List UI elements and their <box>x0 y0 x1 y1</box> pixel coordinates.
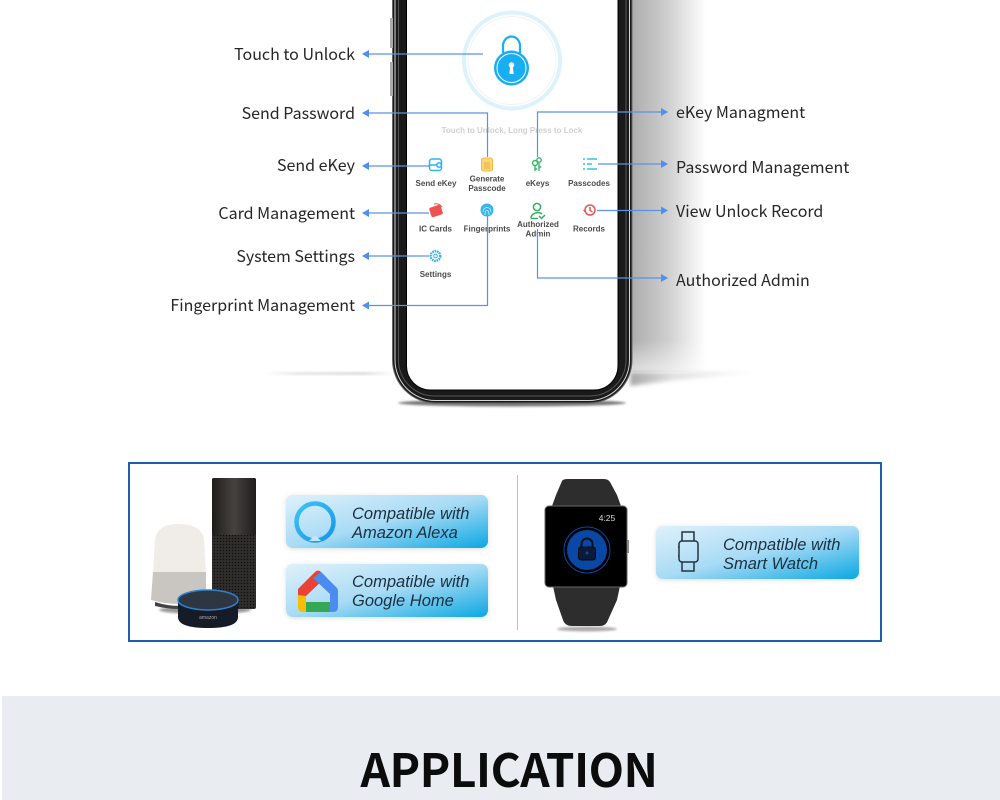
badge text: Compatible with <box>723 536 840 554</box>
badge: Smart Watch <box>656 526 859 580</box>
callout labels, left: Fingerprint Management <box>170 292 355 316</box>
watch lock icon <box>564 527 610 573</box>
icon: authorized admin <box>531 203 545 218</box>
icon: watch outline <box>678 532 698 571</box>
callout labels, left: System Settings <box>236 243 355 267</box>
callout labels, left <box>170 41 356 316</box>
phone drop shadow on the wall <box>265 0 770 406</box>
callout labels, right <box>676 99 849 291</box>
icon: padlock <box>494 36 529 86</box>
label: Records: Records <box>573 224 606 234</box>
icon: records <box>583 205 595 215</box>
watch time: 4:25 <box>599 513 616 523</box>
label: Authorized Admin: Authorized <box>517 220 559 229</box>
app menu grid <box>416 158 610 279</box>
round speaker <box>178 590 238 628</box>
label: Authorized Admin: Admin <box>526 230 551 238</box>
badge: Amazon Alexa <box>286 495 488 549</box>
label: IC Cards: IC Cards <box>419 224 452 234</box>
badge: Google Home <box>286 564 488 618</box>
callout labels, right: Authorized Admin <box>676 267 810 291</box>
white speaker <box>151 524 206 609</box>
label: Send eKey: Send eKey <box>416 179 457 188</box>
panel: compatibility <box>129 463 881 641</box>
icon: eKeys <box>532 158 541 171</box>
unlock ring <box>464 12 560 108</box>
icon: Alexa ring <box>296 504 334 541</box>
icon: generate passcode <box>482 158 492 171</box>
icon: fingerprints <box>480 204 494 216</box>
icon: send eKey <box>430 159 442 170</box>
label: Generate Passcode: Passcode <box>468 184 506 193</box>
callout labels, left: Card Management <box>218 200 355 224</box>
smart watch <box>545 479 629 632</box>
callout lines and arrows <box>363 54 667 306</box>
icon: settings <box>431 251 440 261</box>
black tower speaker <box>212 478 256 609</box>
badge text: Compatible with <box>352 573 469 591</box>
callout labels, right: Password Management <box>676 154 849 178</box>
label: Settings: Settings <box>420 270 452 279</box>
callout labels, left: Send Password <box>242 100 355 124</box>
callout labels, right: eKey Managment <box>676 99 805 123</box>
badge text: Amazon Alexa <box>351 524 458 542</box>
hint text: Touch to Unlock, Long Press to Lock <box>442 126 583 135</box>
heading: APPLICATION <box>359 735 658 800</box>
phone <box>390 0 632 403</box>
label: Fingerprints: Fingerprints <box>464 224 511 234</box>
icon: passcodes <box>583 159 597 169</box>
round speaker: amazon <box>199 615 217 621</box>
badge text: Google Home <box>352 592 454 610</box>
badge text: Compatible with <box>352 505 469 523</box>
icon: IC cards <box>429 204 443 218</box>
smart speakers <box>151 478 256 628</box>
callout labels, left: Send eKey <box>277 152 356 176</box>
application section background <box>2 696 1000 800</box>
callout labels, left: Touch to Unlock <box>234 41 355 65</box>
label: eKeys: eKeys <box>526 179 550 188</box>
callout labels, right: View Unlock Record <box>676 198 823 222</box>
badge text: Smart Watch <box>723 555 818 573</box>
label: Passcodes: Passcodes <box>568 179 610 188</box>
icon: Google Home <box>298 570 338 612</box>
label: Generate Passcode: Generate <box>470 174 504 184</box>
